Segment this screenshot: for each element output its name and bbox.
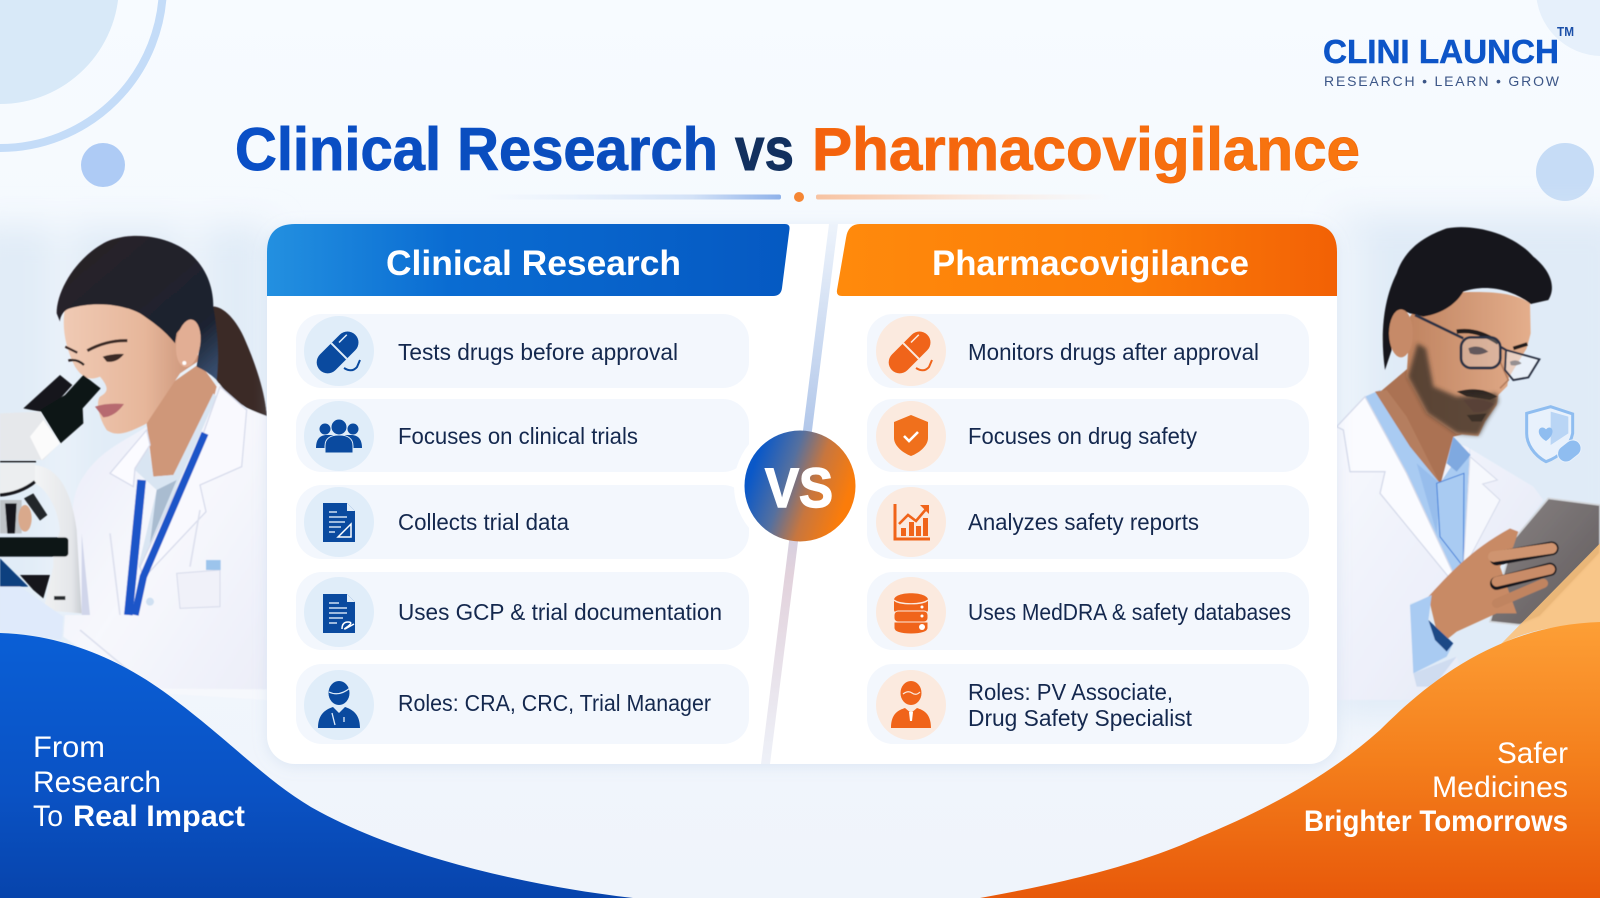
icon: doctor xyxy=(318,681,360,728)
row: drug safety xyxy=(867,399,1309,472)
illustration: woman scientist at microscope xyxy=(0,236,267,700)
vs badge: VS xyxy=(765,456,833,519)
logo: CLINI LAUNCH xyxy=(1323,33,1559,70)
tagline left xyxy=(33,731,245,833)
centre diagonal divider xyxy=(761,224,838,764)
tagline left: Real Impact xyxy=(73,800,245,833)
row: roles: Roles: CRA, CRC, Trial Manager xyxy=(398,690,711,716)
icon: shield xyxy=(894,415,928,456)
icon: signed document xyxy=(323,594,355,633)
row: meddra: Uses MedDRA & safety databases xyxy=(968,599,1291,625)
tagline left: To xyxy=(33,800,63,833)
row: pv roles: Drug Safety Specialist xyxy=(968,705,1193,731)
row: roles xyxy=(296,664,749,744)
wave: orange bottom right xyxy=(980,622,1600,898)
icon: orange capsule xyxy=(884,327,935,378)
icon: group of people xyxy=(316,419,362,453)
header: pharmacovigilance: Pharmacovigilance xyxy=(932,244,1249,283)
row: drug safety: Focuses on drug safety xyxy=(968,423,1197,449)
wave: blue bottom left xyxy=(0,633,633,898)
row: trial data xyxy=(296,485,749,559)
decorative circles top right xyxy=(1536,0,1600,201)
row: monitors drugs: Monitors drugs after approval xyxy=(968,339,1259,365)
panel: clinical research column xyxy=(267,224,790,744)
icon: document xyxy=(323,503,355,542)
icon: rising chart xyxy=(895,504,930,539)
logo: TM xyxy=(1557,24,1574,39)
row: gcp documentation xyxy=(296,572,749,650)
title: vs xyxy=(735,116,794,183)
vs badge xyxy=(744,430,856,542)
header: pharmacovigilance xyxy=(837,224,1337,296)
row: tests drugs: Tests drugs before approval xyxy=(398,339,678,365)
decorative circles top left xyxy=(0,0,163,187)
row: safety reports: Analyzes safety reports xyxy=(968,509,1199,535)
tagline right xyxy=(1304,737,1568,838)
row: monitors drugs xyxy=(867,314,1309,388)
panel: comparison card xyxy=(267,224,1337,764)
tagline right: Brighter Tomorrows xyxy=(1304,805,1568,838)
tagline right: Safer xyxy=(1497,737,1568,770)
header: clinical research: Clinical Research xyxy=(386,244,681,283)
vs badge halo xyxy=(734,420,866,552)
title: Pharmacovigilance xyxy=(812,116,1360,183)
title xyxy=(235,116,1360,183)
blurred lab background left xyxy=(0,225,270,655)
icon: capsule xyxy=(312,327,363,378)
row: trial data: Collects trial data xyxy=(398,509,569,535)
row: clinical trials: Focuses on clinical trials xyxy=(398,423,638,449)
row: tests drugs xyxy=(296,314,749,388)
title: Clinical Research xyxy=(235,116,718,183)
row: pv roles xyxy=(867,664,1309,744)
panel: pharmacovigilance column xyxy=(837,224,1337,744)
row: meddra xyxy=(867,572,1309,650)
icon: database xyxy=(894,593,928,634)
row: pv roles: Roles: PV Associate, xyxy=(968,679,1173,705)
tagline left: Research xyxy=(33,766,161,799)
icon: professional xyxy=(891,681,931,728)
row: gcp documentation: Uses GCP & trial documentation xyxy=(398,599,722,625)
logo: RESEARCH • LEARN • GROW xyxy=(1324,73,1560,89)
icon: floating shield with capsule xyxy=(1527,407,1584,465)
row: safety reports xyxy=(867,485,1309,559)
header: clinical research xyxy=(267,224,790,296)
blurred lab background right xyxy=(1337,215,1600,715)
logo xyxy=(1323,24,1574,89)
row: clinical trials xyxy=(296,399,749,472)
tagline left: From xyxy=(33,731,105,764)
title underline xyxy=(485,192,1111,202)
illustration: man with tablet xyxy=(1337,227,1600,700)
translucent light orange wave xyxy=(1500,543,1600,645)
tagline right: Medicines xyxy=(1432,771,1568,804)
